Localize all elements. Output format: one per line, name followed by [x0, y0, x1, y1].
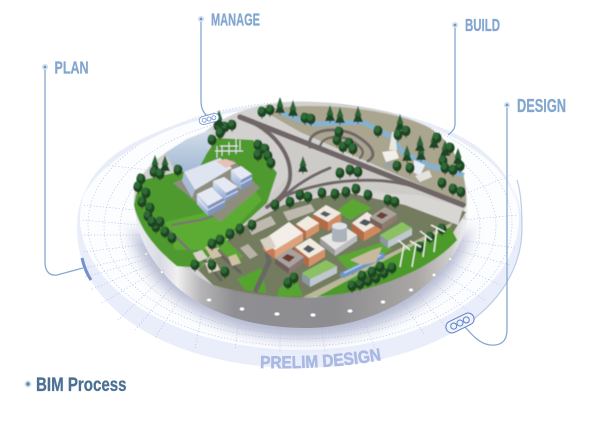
title: BIM Process: BIM Process [36, 374, 127, 396]
substation [215, 138, 243, 158]
back right terrain [262, 106, 466, 205]
green patches [337, 199, 372, 220]
connector: DESIGN [444, 102, 510, 345]
central ground [220, 118, 466, 250]
plaza [350, 247, 382, 265]
label: PLAN: PLAN [54, 58, 88, 78]
train [343, 256, 382, 275]
office complex [173, 158, 260, 222]
front lawn strip [317, 227, 457, 297]
label: PRELIM DESIGN: PRELIM DESIGN [260, 348, 381, 369]
label: DESIGN: DESIGN [517, 96, 566, 116]
connector: BUILD [448, 22, 458, 135]
river [280, 112, 464, 175]
dotted grid [82, 102, 518, 352]
brown buildings [263, 205, 397, 274]
industrial structures [382, 132, 432, 182]
terrain base [134, 102, 467, 298]
pond [165, 130, 212, 172]
green roof buildings [302, 222, 412, 287]
label: MANAGE: MANAGE [211, 10, 260, 30]
label: BUILD: BUILD [465, 15, 500, 35]
trees [133, 97, 466, 293]
wall port dots [144, 253, 451, 317]
houses [193, 204, 315, 273]
connector: PLAN [42, 64, 91, 280]
main lawn [134, 138, 277, 268]
city base [198, 192, 466, 298]
wind turbines [398, 225, 445, 267]
disc side wall [134, 205, 468, 328]
panel: outer ring platform [77, 102, 522, 368]
panel: terrain model [133, 97, 467, 298]
right-hand city yard [345, 192, 463, 225]
road network [170, 117, 463, 290]
science building with silo [320, 222, 357, 256]
connector: MANAGE [198, 16, 220, 125]
